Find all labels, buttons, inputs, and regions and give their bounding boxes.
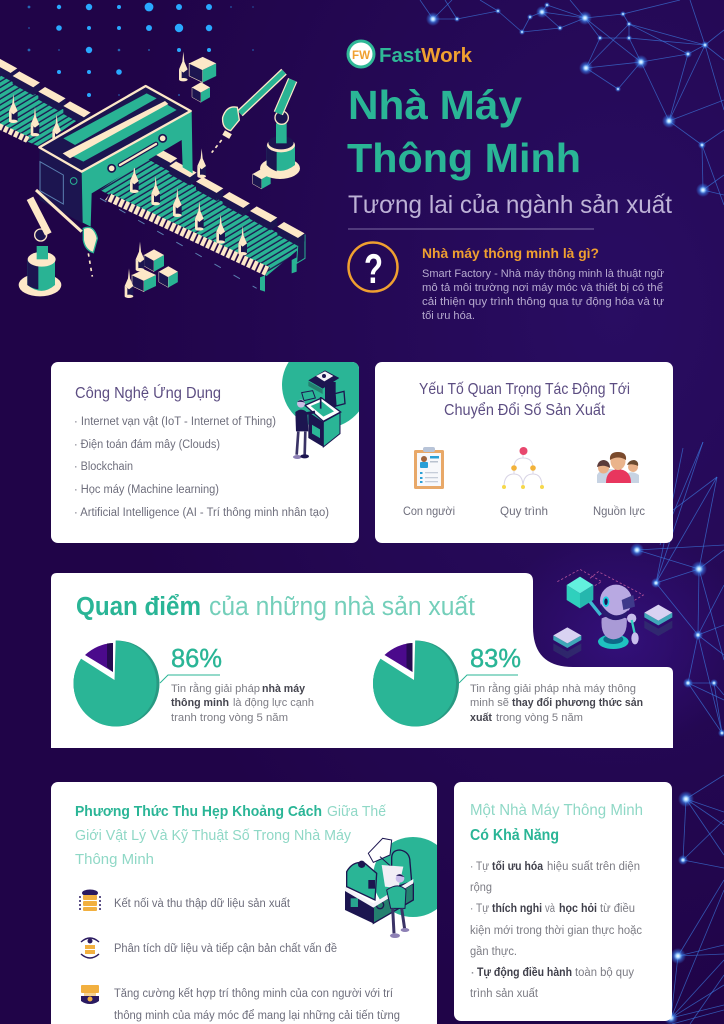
capabilities list: · Tự (470, 903, 489, 915)
subtitle: Tương lai của ngành sản xuất (348, 191, 672, 219)
heading: Chuyển Đổi Số Sản Xuất (444, 402, 606, 419)
icon: data analysis (81, 938, 99, 958)
icon: question mark: ? (364, 245, 383, 292)
factor labels (403, 504, 645, 518)
cube (567, 577, 593, 608)
item text: thông minh của máy móc để mang lại những cải tiến từng (114, 1010, 400, 1022)
panel: công nghệ ứng dụng (51, 362, 359, 543)
technology list: · Artificial Intelligence (AI - Trí thông minh nhân tạo) (74, 507, 329, 519)
stat: 86% (160, 643, 314, 724)
item text: Kết nối và thu thập dữ liệu sản xuất (114, 898, 291, 910)
icon: question mark (348, 242, 398, 292)
stat: 86%: thông minh (171, 697, 229, 709)
logo: FastWork: FastWork (379, 45, 473, 67)
heading: Phương Thức Thu Hẹp Khoảng Cách (75, 803, 322, 820)
heading: Có Khả Năng (470, 827, 559, 844)
heading (419, 381, 630, 419)
stat: 83%: thay đổi phương thức sản (512, 697, 643, 709)
heading: Một Nhà Máy Thông Minh (470, 802, 643, 819)
capabilities list (470, 861, 642, 1000)
stat: 83%: 83% (470, 643, 521, 673)
panel: quan điểm của những nhà sản xuất (51, 573, 673, 748)
heading (75, 803, 387, 868)
title (347, 82, 581, 181)
capabilities list: hiệu suất trên diện (547, 861, 640, 873)
stat: 86%: Tin rằng giải pháp (171, 682, 260, 695)
panel: phương thức thu hẹp khoảng cách (51, 782, 453, 1024)
illustration: operator at machinery (345, 837, 437, 938)
icon: process hierarchy (502, 447, 544, 489)
platforms (553, 605, 672, 659)
icon: people (597, 452, 639, 483)
definition text block: cải thiện quy trình thông qua tự động hóa và tự (422, 296, 665, 308)
logo: FastWork: FW (352, 48, 371, 62)
icon: data collection (80, 890, 100, 911)
illustration: isometric factory conveyor (0, 52, 305, 298)
technology list: · Internet vạn vật (IoT - Internet of Thing) (74, 416, 276, 428)
pie chart: 83% (360, 630, 459, 726)
heading: Công Nghệ Ứng Dụng (75, 385, 221, 402)
heading: Quan điểm (76, 593, 201, 621)
stat: 83%: Tin rằng giải pháp nhà máy thông (470, 682, 636, 695)
stat: 86%: tranh trong vòng 5 năm (171, 712, 288, 724)
item text: Tăng cường kết hợp trí thông minh của con người với trí (114, 988, 394, 1000)
right conveyor (100, 147, 305, 292)
capabilities list: học hỏi (559, 903, 597, 915)
factor labels: Con người (403, 504, 455, 518)
illustration: robot with cubes (553, 569, 672, 659)
boxes and bottles (125, 52, 271, 298)
logo: FastWork (348, 41, 473, 67)
icon: clipboard (414, 447, 444, 489)
capabilities list: và (545, 903, 555, 915)
capabilities list: rộng (470, 882, 492, 894)
technology list: · Học máy (Machine learning) (74, 484, 219, 496)
icon: human-machine (81, 985, 99, 1004)
technology list (74, 416, 329, 519)
gate machine (39, 86, 193, 227)
capabilities list: kiện mới trong thời gian thực hoặc (470, 925, 642, 937)
capabilities list: · (470, 967, 475, 979)
definition text block: Nhà máy thông minh là gì? (422, 246, 599, 261)
panel: yếu tố quan trọng (375, 362, 673, 543)
capabilities list: toàn bộ quy (575, 967, 634, 979)
pie chart: 86% (60, 630, 160, 726)
definition text block: mô tả môi trường nơi máy móc và thiết bị có thể (422, 282, 663, 294)
left conveyor (0, 57, 91, 147)
heading: Yếu Tố Quan Trọng Tác Động Tới (419, 381, 630, 398)
dot grid decoration (28, 3, 254, 97)
left robot arm (19, 190, 97, 296)
right robot arm (212, 72, 300, 179)
heading: Giữa Thế (327, 803, 387, 820)
illustration: engineer at machine (282, 362, 359, 459)
stat: 86%: là động lực cạnh (233, 697, 314, 709)
capabilities list: gần thực. (470, 946, 517, 958)
stat: 83%: trong vòng 5 năm (496, 712, 583, 724)
capabilities list: tối ưu hóa (492, 861, 544, 873)
stat: 83%: xuất (470, 712, 492, 724)
item text: Phân tích dữ liệu và tiếp cận bản chất vấn đề (114, 943, 337, 955)
capabilities list: · Tự (470, 861, 489, 873)
network graphic: right side (630, 442, 724, 1024)
heading: Giới Vật Lý Và Kỹ Thuật Số Trong Nhà Máy (75, 827, 351, 844)
panel: một nhà máy thông minh có khả năng (454, 782, 672, 1021)
factor labels: Nguồn lực (593, 504, 645, 518)
stat: 86%: nhà máy (262, 683, 306, 695)
stat: 83% (459, 643, 643, 724)
title: Nhà Máy (348, 82, 522, 128)
definition text block: tối ưu hóa. (422, 310, 475, 322)
stat: 83%: minh sẽ (470, 697, 509, 709)
heading (470, 802, 643, 844)
divider (348, 228, 594, 230)
capabilities list: thích nghi (492, 903, 542, 915)
heading: của những nhà sản xuất (209, 593, 475, 621)
factor labels: Quy trình (500, 504, 548, 518)
robot (590, 585, 639, 649)
stat: 86%: 86% (171, 643, 222, 673)
network graphic: top right (420, 0, 724, 205)
technology list: · Blockchain (74, 461, 133, 473)
heading: Thông Minh (75, 851, 154, 868)
title: Thông Minh (347, 135, 581, 181)
definition text block: Smart Factory - Nhà máy thông minh là thuật ngữ (422, 268, 665, 280)
technology list: · Điện toán đám mây (Clouds) (74, 439, 220, 451)
capabilities list: Tự động điều hành (477, 967, 572, 979)
heading (76, 593, 475, 621)
background glow (490, 530, 724, 750)
definition text block (422, 246, 665, 322)
capabilities list: trình sản xuất (470, 988, 539, 1000)
item text (114, 988, 400, 1022)
capabilities list: từ điều (600, 903, 635, 915)
